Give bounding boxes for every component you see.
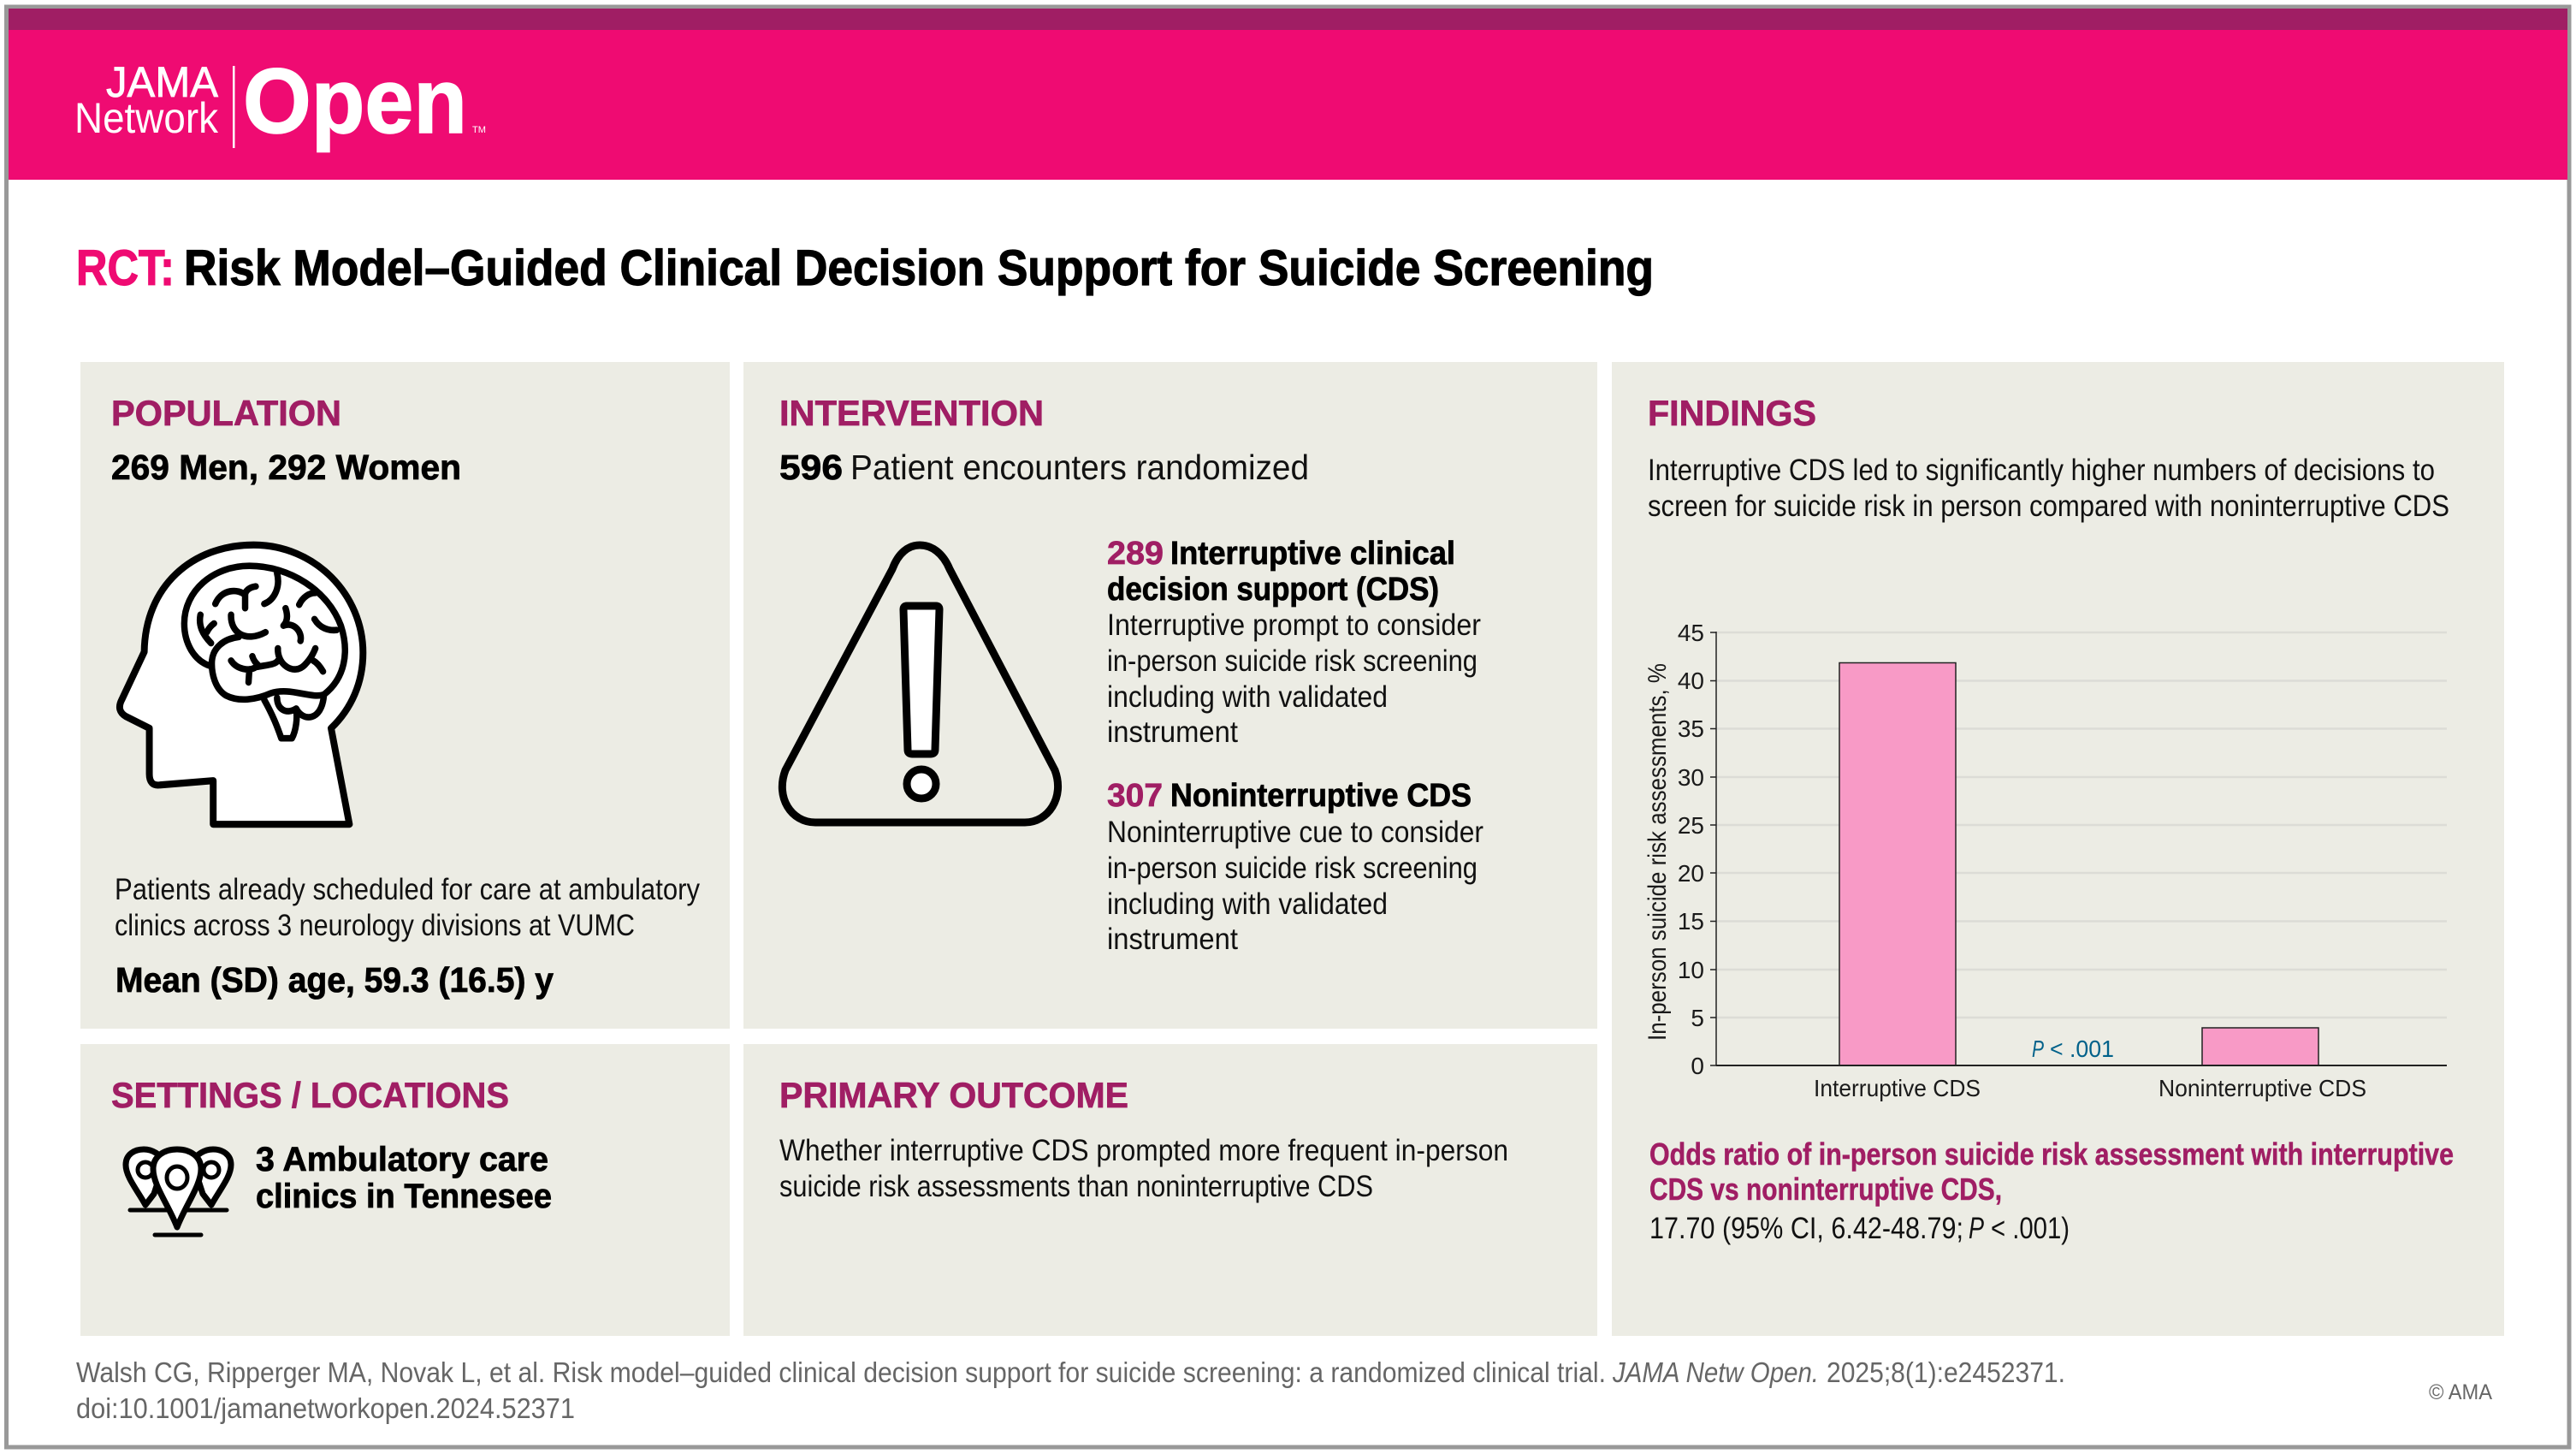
bar: noninterruptive CDS [2202, 1028, 2318, 1065]
bar chart [1643, 620, 2447, 1101]
findings summary: Interruptive CDS led to significantly higher numbers of decisions to [1648, 454, 2435, 487]
mean age: Mean (SD) age, 59.3 (16.5) y [115, 960, 554, 1000]
primary outcome text: suicide risk assessments than noninterruptive CDS [779, 1170, 1373, 1203]
odds ratio heading: CDS vs noninterruptive CDS, [1649, 1172, 2002, 1207]
encounters randomized: Patient encounters randomized [850, 448, 1309, 487]
logo: JAMA Network Open: Open [243, 49, 467, 152]
citation: doi:10.1001/jamanetworkopen.2024.52371 [76, 1392, 575, 1424]
findings summary: screen for suicide risk in person compared with noninterruptive CDS [1648, 490, 2449, 523]
heading: primary outcome: PRIMARY OUTCOME [779, 1075, 1128, 1115]
odds ratio value: < .001) [1991, 1212, 2070, 1245]
population counts: 269 Men, 292 Women [111, 448, 461, 487]
x labels: Interruptive CDS [1814, 1075, 1981, 1101]
header banner [9, 9, 2567, 180]
findings summary [1648, 454, 2449, 523]
y axis: 30 [1678, 764, 1704, 791]
arm: noninterruptive CDS: including with validated [1107, 887, 1388, 921]
title: RCT: [76, 240, 175, 296]
arm: interruptive CDS: including with validated [1107, 680, 1388, 714]
odds ratio value: P [1969, 1212, 1984, 1245]
y axis: 10 [1678, 957, 1704, 983]
icon: head with brain [120, 545, 363, 824]
citation: JAMA Netw Open. [1612, 1356, 1819, 1388]
panel: findings [1612, 362, 2504, 1336]
y axis: 25 [1678, 812, 1704, 839]
panel: primary outcome [743, 1044, 1597, 1336]
citation: Walsh CG, Ripperger MA, Novak L, et al. Risk model–guided clinical decision support for suicide screening: a randomized clinical trial. [76, 1356, 1606, 1388]
x labels [1814, 1075, 2366, 1101]
odds ratio value: 17.70 (95% CI, 6.42-48.79; [1649, 1212, 1963, 1245]
y axis [1643, 620, 1716, 1079]
primary outcome text: Whether interruptive CDS prompted more frequent in-person [779, 1134, 1508, 1167]
arm: interruptive CDS: Interruptive clinical [1170, 536, 1455, 572]
arm: interruptive CDS: decision support (CDS) [1107, 572, 1439, 608]
arm: interruptive CDS: Interruptive prompt to consider [1107, 608, 1481, 642]
y axis: In-person suicide risk assessments, % [1643, 663, 1672, 1041]
citation: 2025;8(1):e2452371. [1827, 1356, 2065, 1388]
title: Risk Model–Guided Clinical Decision Support for Suicide Screening [184, 240, 1654, 296]
arm: noninterruptive CDS: 307 [1107, 778, 1163, 814]
settings text: 3 Ambulatory care [256, 1141, 548, 1178]
heading: population: POPULATION [111, 393, 341, 433]
arm: interruptive CDS: in-person suicide risk screening [1107, 644, 1477, 678]
settings text [256, 1141, 552, 1215]
x labels: Noninterruptive CDS [2159, 1075, 2366, 1101]
icon: map pins [126, 1149, 231, 1235]
logo: JAMA Network Open: JAMA [106, 58, 219, 106]
arm: interruptive CDS: 289 [1107, 536, 1164, 572]
logo: JAMA Network Open [74, 49, 486, 152]
arm: noninterruptive CDS: Noninterruptive cue to consider [1107, 816, 1483, 849]
p value: < .001 [2050, 1036, 2114, 1062]
p value: P [2032, 1036, 2044, 1062]
y axis: 15 [1678, 908, 1704, 935]
bar: interruptive CDS [1839, 662, 1956, 1065]
heading: intervention: INTERVENTION [779, 393, 1044, 433]
y axis: 5 [1691, 1005, 1704, 1031]
y axis: 40 [1678, 668, 1704, 694]
panel: population [80, 362, 730, 1029]
encounters randomized: 596 [779, 448, 843, 487]
logo: JAMA Network Open: Network [74, 94, 219, 142]
arm: noninterruptive CDS: Noninterruptive CDS [1170, 778, 1472, 814]
population description: clinics across 3 neurology divisions at VUMC [115, 909, 635, 942]
odds ratio heading: Odds ratio of in-person suicide risk assessment with interruptive [1649, 1136, 2454, 1172]
icon: warning triangle [782, 545, 1058, 822]
arm: interruptive CDS [1107, 536, 1481, 749]
y axis: 0 [1691, 1053, 1704, 1079]
arm: noninterruptive CDS: instrument [1107, 923, 1238, 956]
panel: settings and locations [80, 1044, 730, 1336]
arm: interruptive CDS: instrument [1107, 715, 1238, 749]
citation [76, 1356, 2065, 1424]
y axis: 20 [1678, 860, 1704, 887]
odds ratio heading [1649, 1136, 2454, 1207]
population description: Patients already scheduled for care at ambulatory [115, 873, 700, 906]
panel: intervention [743, 362, 1597, 1029]
population description [115, 873, 700, 942]
heading: settings: SETTINGS / LOCATIONS [111, 1075, 509, 1115]
copyright: © AMA [2429, 1380, 2492, 1404]
settings text: clinics in Tennesee [256, 1178, 552, 1215]
logo: JAMA Network Open: TM [472, 125, 486, 135]
arm: noninterruptive CDS: in-person suicide risk screening [1107, 852, 1477, 885]
y axis: 45 [1678, 620, 1704, 646]
arm: noninterruptive CDS [1107, 778, 1483, 956]
x axis [1716, 1065, 2447, 1066]
heading: findings: FINDINGS [1648, 393, 1816, 433]
y axis: 35 [1678, 715, 1704, 742]
primary outcome text [779, 1134, 1508, 1203]
